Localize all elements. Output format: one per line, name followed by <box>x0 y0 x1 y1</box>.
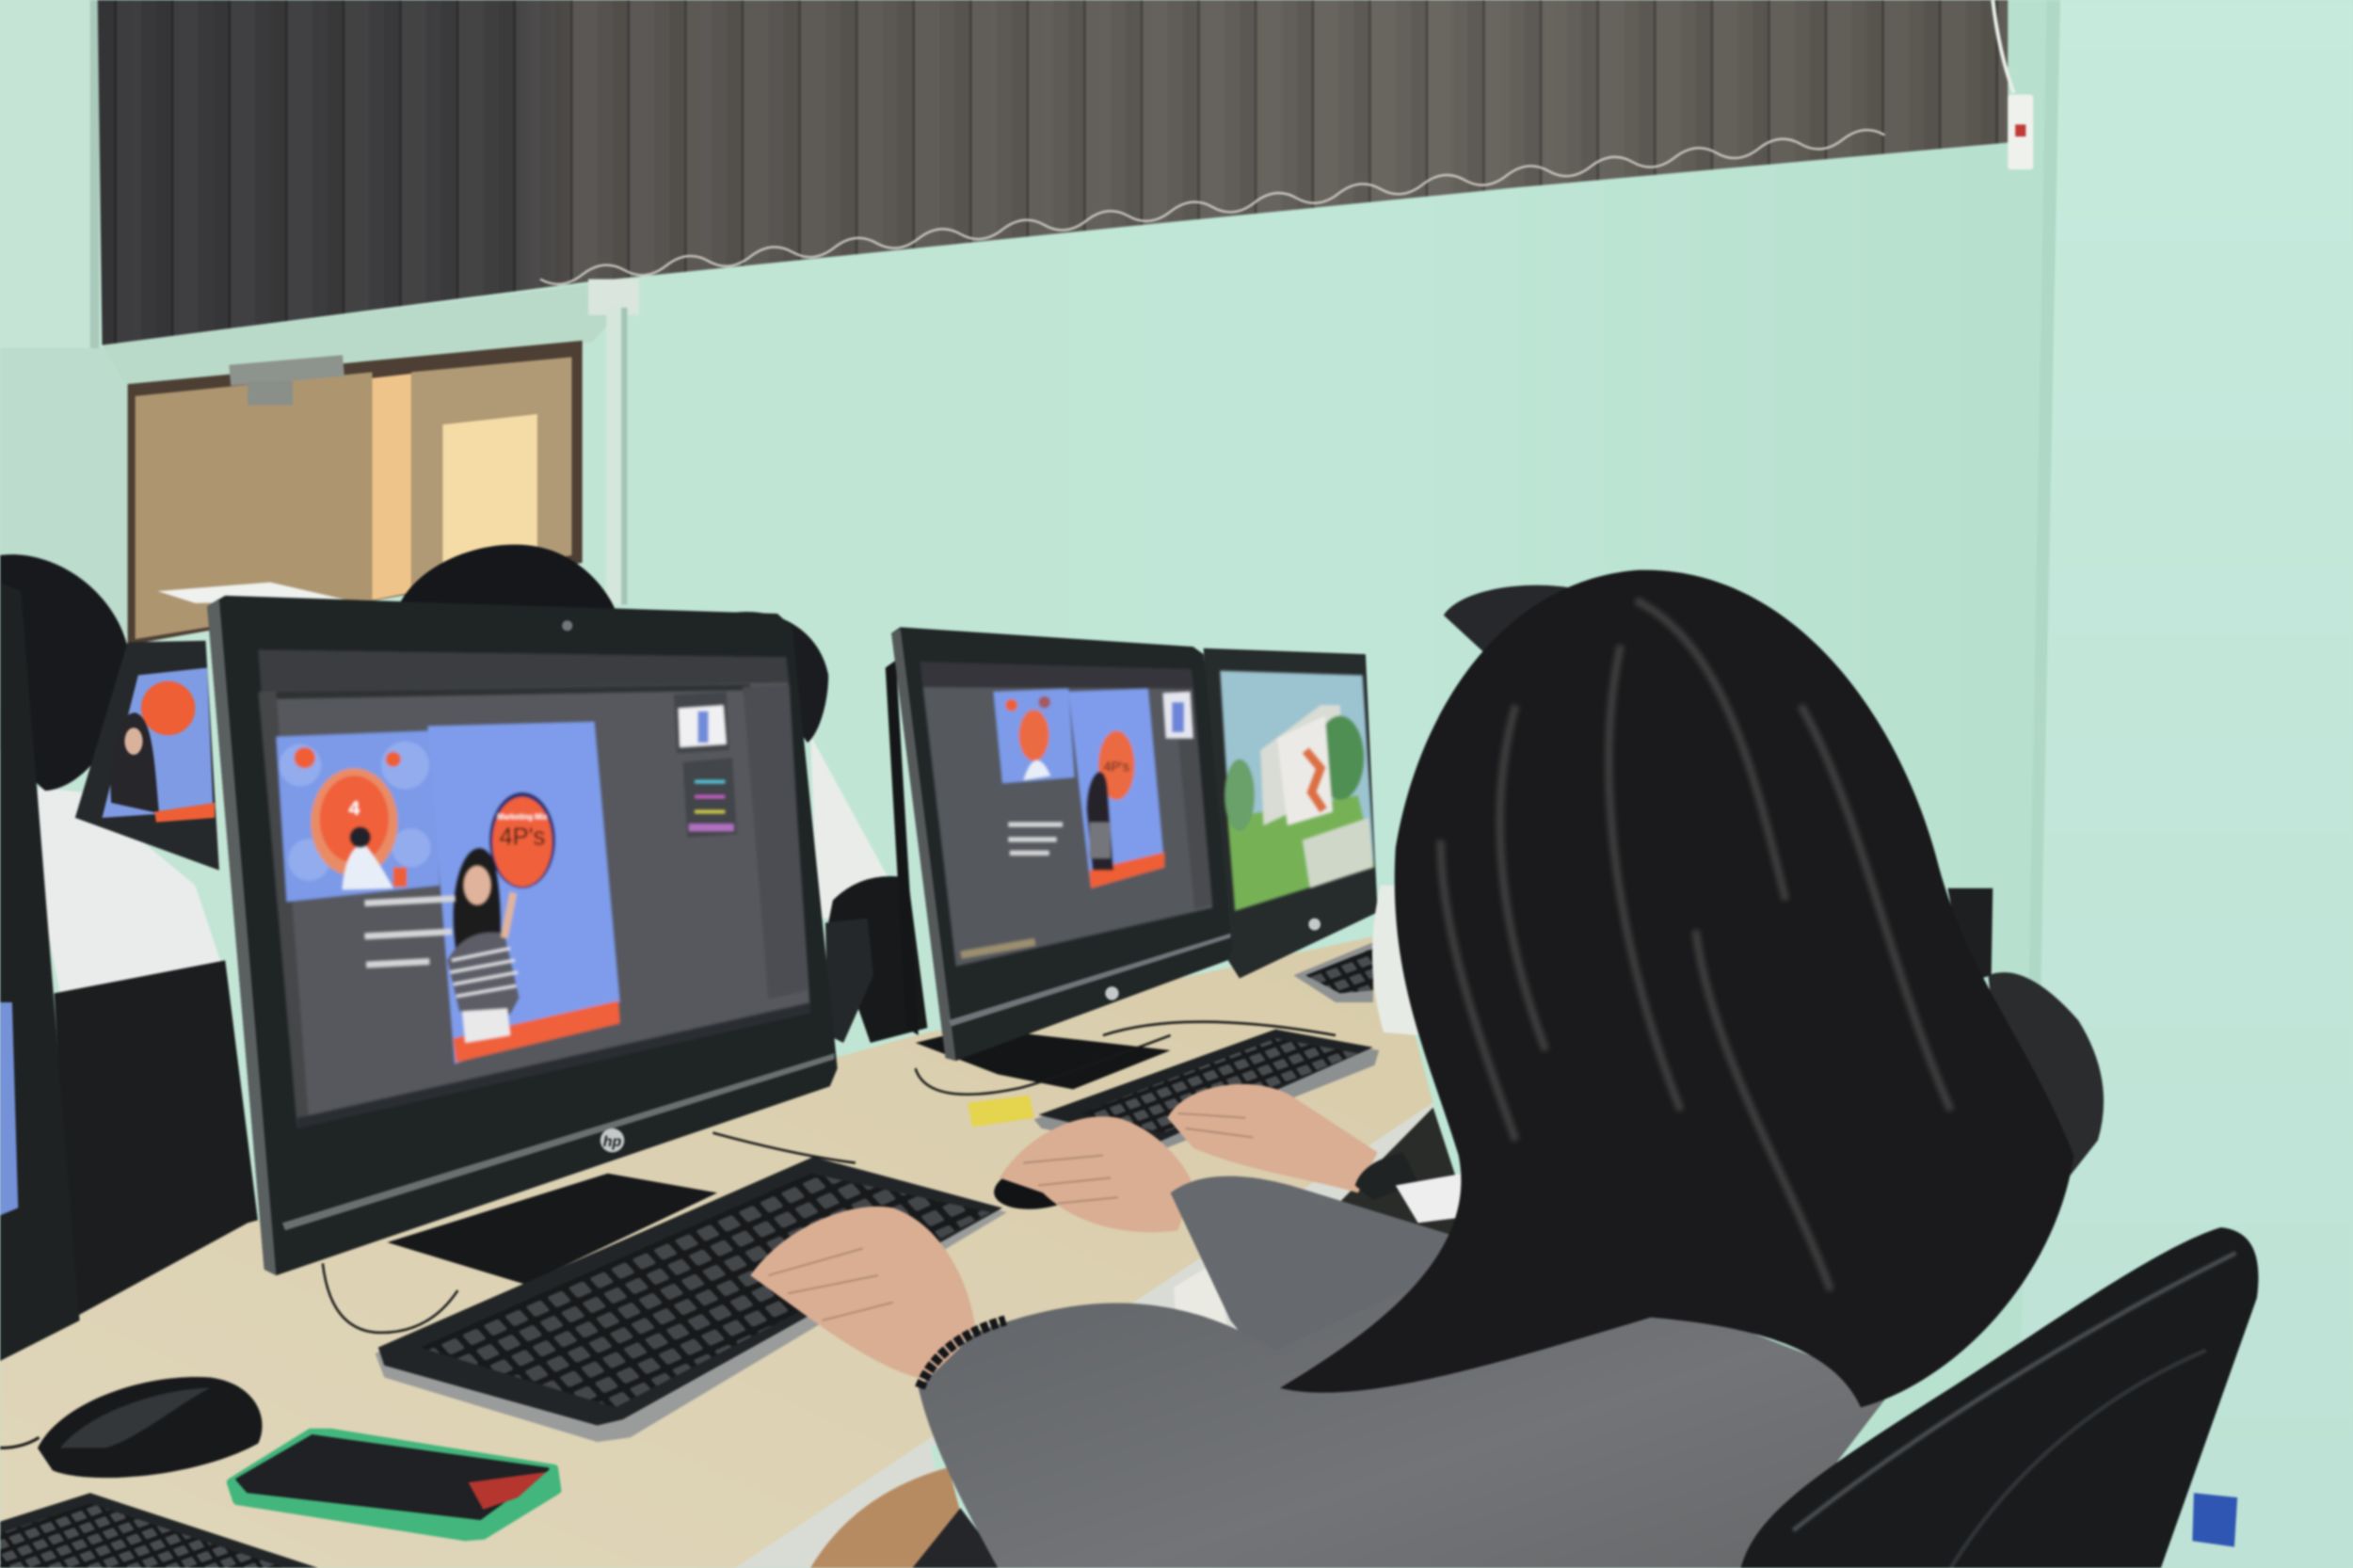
black office chair <box>1740 1227 2258 1568</box>
desk <box>0 934 1433 1568</box>
circle badge: Marketing Mix <box>497 812 548 821</box>
main monitor stand <box>387 1174 717 1285</box>
circle badge: 4P's <box>499 824 545 851</box>
second mouse <box>990 1155 1096 1216</box>
thumbnail <box>1163 692 1193 738</box>
door <box>128 341 583 646</box>
bracelet <box>920 1320 1005 1388</box>
main artboard <box>1068 689 1164 888</box>
right monitor <box>1204 648 1378 978</box>
main artboard: 4P's <box>1104 760 1129 775</box>
hp logo: hp <box>603 1134 622 1150</box>
hp logo <box>600 1128 624 1152</box>
chair in the middle <box>828 876 927 1043</box>
main monitor <box>207 596 838 1275</box>
student: left foreground <box>0 554 225 993</box>
near arm hand on mouse <box>1000 1116 1193 1232</box>
middle monitor <box>886 627 1232 1061</box>
vertical blinds <box>98 0 2008 345</box>
hp logo <box>1308 919 1321 930</box>
circle badge <box>489 792 555 888</box>
right pillar <box>2010 0 2353 1568</box>
small artboard <box>276 730 440 902</box>
second keyboard <box>1034 1030 1379 1152</box>
app menu bars <box>258 649 790 692</box>
wrist watch <box>1355 1152 1418 1200</box>
monitor screen <box>920 662 1212 967</box>
wall alarm and cable <box>1993 0 2033 169</box>
left wall <box>0 0 128 633</box>
desktop wallpaper <box>1220 671 1374 911</box>
hand on keyboard <box>750 1207 975 1381</box>
chair in the foreground background <box>1947 888 2104 1197</box>
small artboard <box>994 689 1075 783</box>
main artboard <box>427 722 620 1064</box>
monitor screen <box>258 649 810 1128</box>
sweater body <box>919 1245 1894 1568</box>
webcam <box>562 620 572 631</box>
taskbar <box>297 1002 810 1128</box>
bottom left keyboard <box>0 1493 318 1568</box>
wall conduit <box>588 280 639 604</box>
face mask <box>1372 886 1418 1035</box>
middle monitor stand <box>916 1028 1171 1089</box>
under desk area <box>735 1103 1478 1568</box>
left mouse <box>0 1377 263 1478</box>
student: head behind main monitor <box>398 545 618 618</box>
yellow eraser box <box>968 1096 1034 1127</box>
small artboard: 4 <box>349 798 360 820</box>
smartphone <box>232 1433 557 1537</box>
main keyboard <box>376 1157 1007 1442</box>
student's arms and sweater <box>750 1084 1894 1568</box>
sleeve upper arm <box>1171 1176 1515 1411</box>
student behind head <box>1444 585 1591 667</box>
lintel under the blinds <box>103 280 631 387</box>
loose paper <box>157 583 348 603</box>
student's long black hair <box>1280 570 2073 1407</box>
background students <box>0 545 927 1320</box>
chair behind the left student <box>54 960 258 1320</box>
left edge monitor <box>0 583 80 1361</box>
far keyboard <box>1293 942 1373 1002</box>
properties panel <box>743 684 808 1000</box>
student: middle background <box>720 612 901 919</box>
woman on poster <box>447 848 520 1043</box>
back row monitor <box>75 641 219 871</box>
cables on the desk <box>323 1022 1336 1333</box>
white cuff <box>1396 1174 1478 1223</box>
splash dialog <box>1277 715 1333 825</box>
navigator panel <box>674 692 729 753</box>
caption on the canvas <box>365 896 455 968</box>
far arm and hand <box>1167 1084 1378 1192</box>
hp logo <box>1105 986 1119 1000</box>
taskbar icons <box>960 938 1035 959</box>
colour panel <box>682 758 737 838</box>
caption on the canvas <box>1008 823 1063 856</box>
blue wall sticker <box>2192 1493 2237 1547</box>
